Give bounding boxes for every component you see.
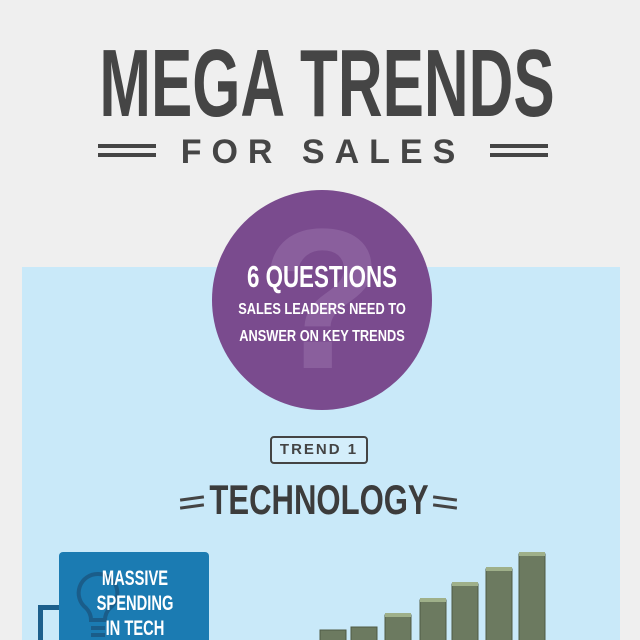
panel: trend 1 [22,267,620,640]
callout: massive spending in tech: MASSIVE [102,567,168,590]
badge: 6 questions circle: SALES LEADERS NEED TO [238,301,406,318]
badge: 6 questions circle: ANSWER ON KEY TRENDS [239,328,405,345]
callout: massive spending in tech [59,552,209,640]
chart: money stacks [320,552,546,640]
trend label box [270,436,368,464]
callout: massive spending in tech: SPENDING [97,592,173,615]
subtitle: for sales: FOR SALES [181,133,465,171]
badge: 6 questions circle: ? [261,190,383,410]
trend label box: TREND 1 [280,441,358,458]
badge: 6 questions circle [212,190,432,410]
title: MEGA TRENDS [99,30,555,137]
connector line [38,605,65,640]
badge: 6 questions circle: 6 QUESTIONS [247,259,397,294]
subtitle: for sales [98,133,548,171]
icon: lightbulb [76,572,120,637]
heading: technology: TECHNOLOGY [209,476,429,523]
callout: massive spending in tech: IN TECH [106,617,164,640]
